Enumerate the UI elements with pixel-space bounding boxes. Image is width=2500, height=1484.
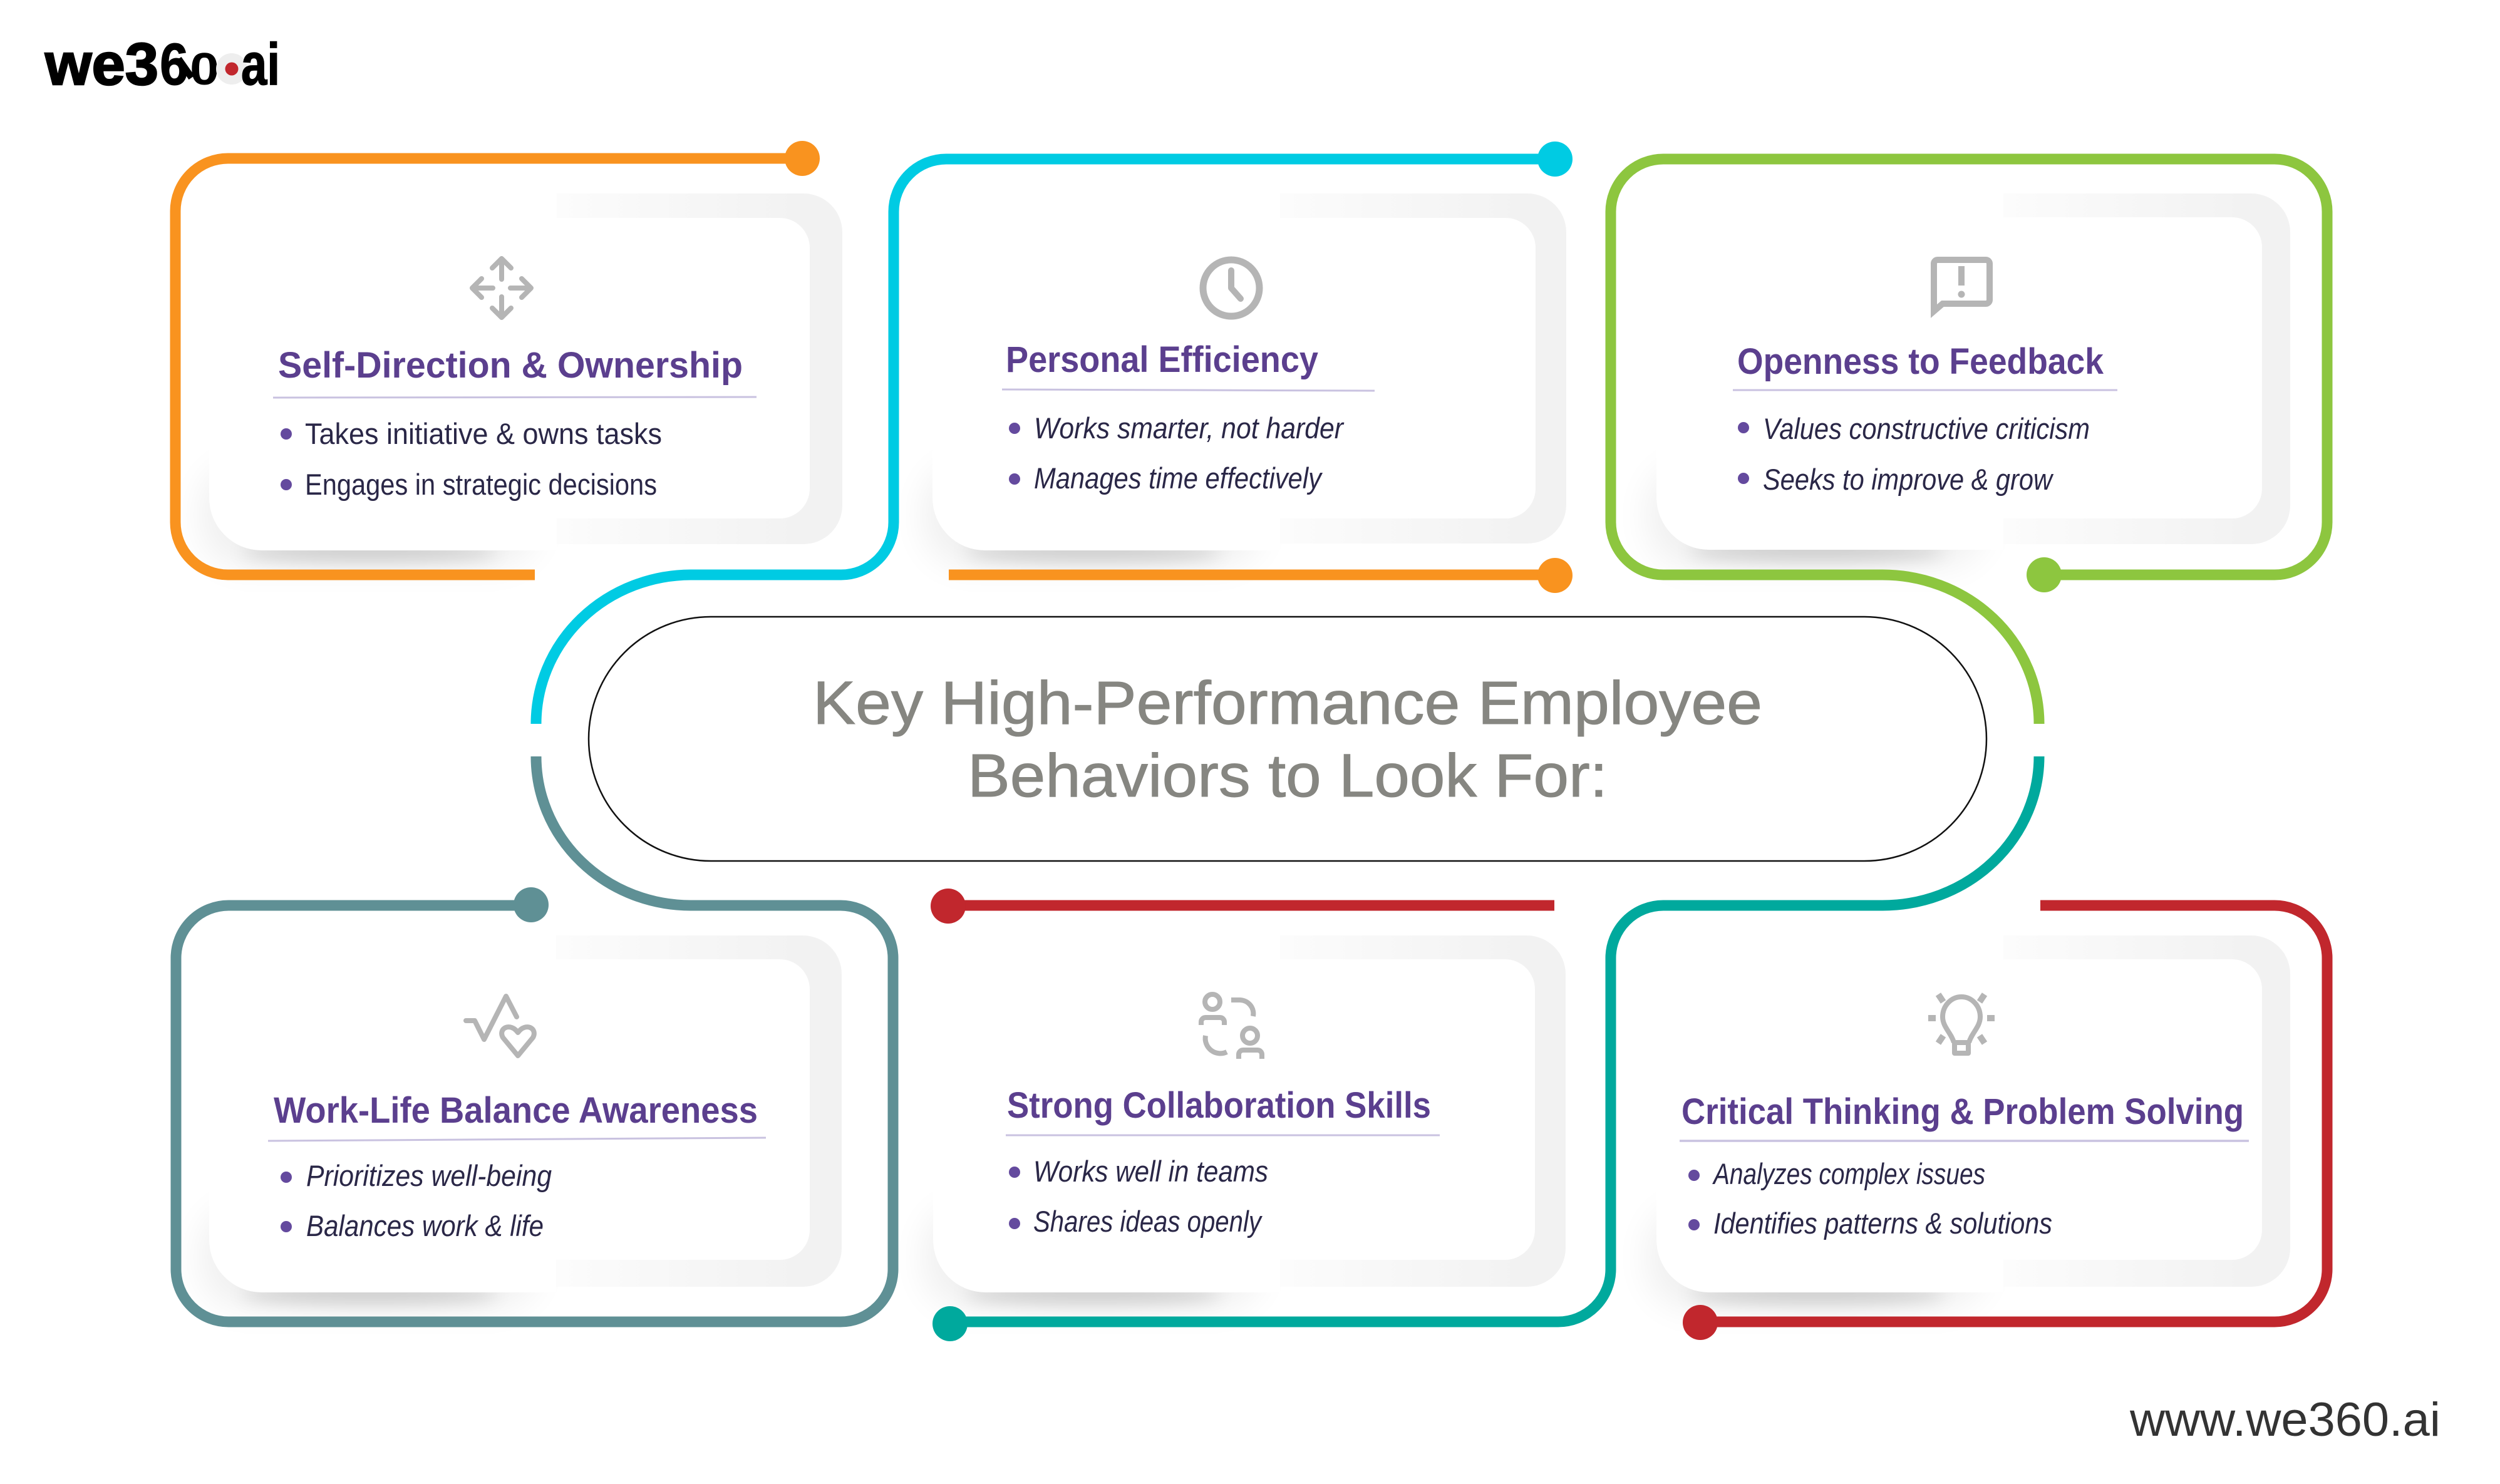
heading: Self-Direction & Ownership: Self-Direction & Ownership [278,345,743,386]
bullet list: Works well in teams [1033,1155,1268,1188]
bullet list: Takes initiative & owns tasks [305,417,662,450]
logo: we360.ai: we3 [44,31,158,98]
connector: green frame to title [1611,159,2327,724]
connector: cyan line to title [536,142,1573,724]
bullet list: Identifies patterns & solutions [1713,1207,2052,1240]
bullet list: Analyzes complex issues [1712,1157,1985,1190]
icon: move arrows [472,259,531,317]
bullet list: Values constructive criticism [1763,412,2090,445]
bullet list [1009,1155,1268,1238]
panel: Critical Thinking & Problem Solving [1648,930,2290,1309]
icon: heart with pulse [466,996,534,1056]
logo: we360.ai [44,31,280,98]
bullet list [1738,412,2090,496]
connector: slate teal frame to title [176,756,893,1322]
logo: we360.ai: ai [241,31,280,98]
bullet list: Shares ideas openly [1033,1205,1263,1238]
connector: red frame [1683,905,2327,1340]
bullet list: Prioritizes well-being [306,1159,552,1192]
heading: Work-Life Balance Awareness: Work-Life Balance Awareness [274,1090,758,1131]
title text: Key High-Performance Employee [813,669,1762,737]
icon: clock [1203,260,1259,316]
icon: light bulb [1928,994,1995,1053]
panel: Work-Life Balance Awareness [200,930,842,1309]
heading: Critical Thinking & Problem Solving: Critical Thinking & Problem Solving [1681,1091,2244,1132]
logo: we360.ai: 0 [190,44,219,95]
panel: Personal Efficiency [924,188,1566,567]
bullet list [281,417,662,501]
title pill [589,617,1986,861]
connector: teal line from title [932,756,2039,1341]
website url: www.we360.ai [2129,1393,2441,1446]
panel: Strong Collaboration Skills [924,930,1566,1309]
panel: Self-Direction & Ownership [200,188,842,567]
icon: two people exchange [1201,994,1262,1059]
title text: Behaviors to Look For: [968,741,1608,810]
heading: Strong Collaboration Skills: Strong Collaboration Skills [1007,1085,1431,1126]
bullet list: Seeks to improve & grow [1763,463,2054,496]
panel: Openness to Feedback [1648,188,2290,567]
bullet list: Balances work & life [306,1209,544,1242]
bullet list: Manages time effectively [1034,461,1323,495]
title text [813,669,1762,810]
connector: red line above Collaboration [931,889,1554,924]
bullet list [281,1159,552,1242]
logo: we360.ai: 6 [160,31,189,98]
connector: orange frame with dot [175,141,820,575]
heading: Openness to Feedback: Openness to Feedback [1737,341,2104,382]
bullet list: Works smarter, not harder [1034,411,1345,445]
connector: orange line under Personal Efficiency [949,558,1573,593]
icon: feedback bubble [1934,260,1990,311]
bullet list [1009,411,1345,495]
bullet list [1688,1157,2052,1240]
bullet list: Engages in strategic decisions [305,468,657,501]
heading: Personal Efficiency: Personal Efficiency [1006,339,1318,380]
